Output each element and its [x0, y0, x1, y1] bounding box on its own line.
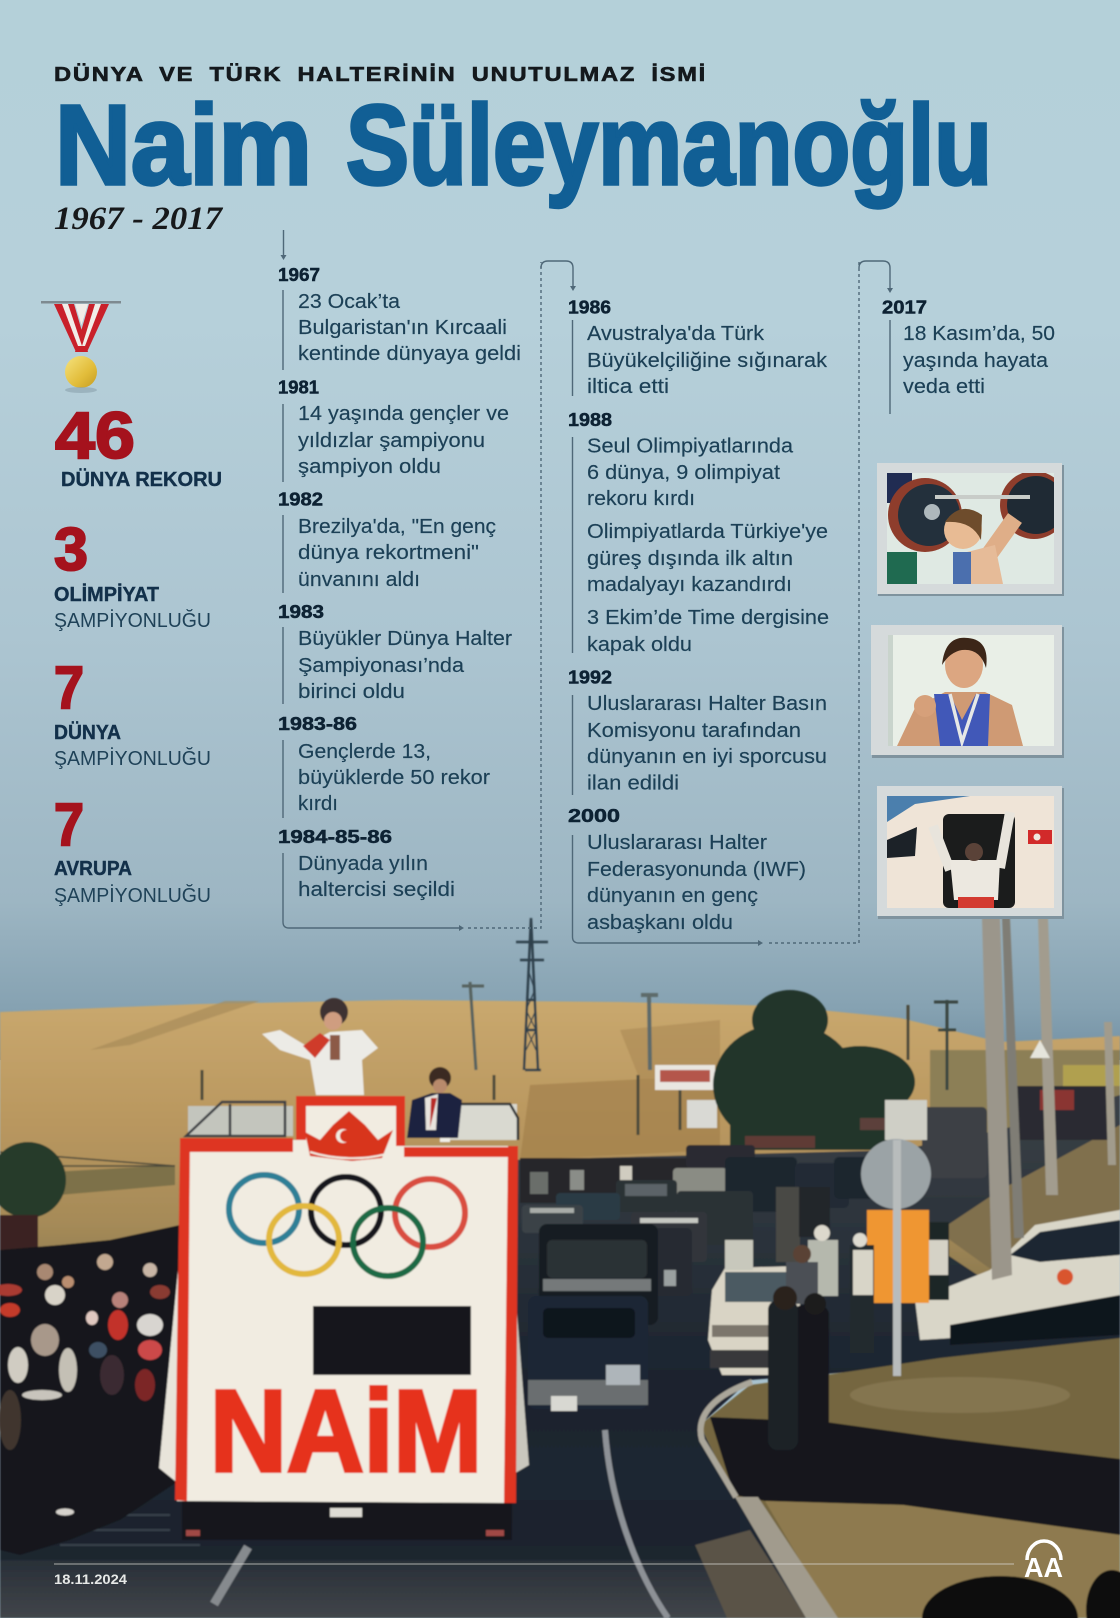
- car: police car: [915, 1210, 1120, 1345]
- photo scene: victory parade: [0, 918, 1120, 1618]
- 1992: [568, 666, 827, 794]
- 1983: Şampiyonası’nda: [298, 654, 465, 677]
- 1967: 23 Ocak’ta: [298, 290, 401, 313]
- stat: world championships: [54, 654, 211, 770]
- 1986: iltica etti: [587, 375, 669, 398]
- stat: olympic championships: [54, 516, 211, 632]
- timeline column 3: 2017: 2017: [882, 296, 927, 318]
- car: white sedan: [708, 1266, 800, 1375]
- 2000: dünyanın en genç: [587, 884, 758, 907]
- 1983-86: büyüklerde 50 rekor: [298, 766, 490, 789]
- 1981: 14 yaşında gençler ve: [298, 402, 509, 425]
- medal icon: [41, 301, 121, 393]
- road markings: [60, 1430, 668, 1618]
- photo 3: waving from plane door: [877, 786, 1064, 919]
- 1988: rekoru kırdı: [587, 487, 695, 510]
- 2000: Uluslararası Halter: [587, 831, 767, 854]
- 1983: birinci oldu: [298, 680, 405, 703]
- stat: olympic championships: 3: [54, 516, 88, 583]
- 1992: 1992: [568, 666, 612, 688]
- man in suit: [407, 1067, 462, 1138]
- hills: [0, 1000, 1120, 1320]
- 1988: [568, 409, 829, 656]
- banner red border: [175, 1096, 518, 1503]
- 1983: Büyükler Dünya Halter: [298, 627, 512, 650]
- title: Süleymanoğlu: [346, 82, 992, 208]
- road: [0, 1095, 1120, 1618]
- car: dark navy sedan: [528, 1296, 648, 1411]
- side cloth: [159, 1270, 180, 1485]
- 1982: Brezilya'da, "En genç: [298, 515, 496, 538]
- 1983-86: kırdı: [298, 792, 338, 815]
- 1992: Komisyonu tarafından: [587, 719, 801, 742]
- timeline column 3: 2017: 18 Kasım’da, 50: [903, 322, 1055, 345]
- 1986: [568, 296, 828, 398]
- timeline connector arrows: [280, 230, 893, 946]
- 1986: 1986: [568, 296, 611, 318]
- 1983: [278, 601, 512, 703]
- bottom heads silhouette: [922, 1570, 1120, 1618]
- stat: world championships: 7: [54, 654, 84, 721]
- 1984-85-86: Dünyada yılın: [298, 852, 428, 875]
- stat: world championships: DÜNYA: [54, 721, 121, 744]
- stat: olympic championships: ŞAMPİYONLUĞU: [54, 609, 211, 632]
- 1988: 3 Ekim’de Time dergisine: [587, 606, 829, 629]
- background sky: [0, 0, 1120, 1060]
- 1981: yıldızlar şampiyonu: [298, 429, 485, 452]
- 1988: Olimpiyatlarda Türkiye'ye: [587, 520, 828, 543]
- 1988: Seul Olimpiyatlarında: [587, 434, 794, 458]
- timeline column 1: [278, 264, 521, 901]
- 2000: 2000: [568, 805, 620, 826]
- crowd behind cars: [520, 1118, 920, 1203]
- 1983-86: Gençlerde 13,: [298, 740, 431, 763]
- 1981: şampiyon oldu: [298, 455, 441, 478]
- stat: european championships: AVRUPA: [54, 858, 132, 880]
- 1988: madalyayı kazandırdı: [587, 573, 792, 596]
- 1967: 1967: [278, 264, 320, 285]
- 1982: ünvanını aldı: [298, 568, 420, 591]
- poles: [885, 918, 1116, 1280]
- road signs: [861, 1139, 931, 1376]
- life dates: 1967 - 2017: [54, 201, 224, 237]
- stat: european championships: ŞAMPİYONLUĞU: [54, 884, 211, 907]
- 1982: [278, 488, 496, 591]
- upper right grass: [920, 1125, 1120, 1300]
- 1982: 1982: [278, 488, 323, 510]
- 1988: 1988: [568, 409, 612, 430]
- timeline column 3: 2017: [882, 296, 1055, 398]
- crown: [305, 1111, 393, 1161]
- 1967: Bulgaristan'ın Kırcaali: [298, 316, 507, 339]
- stat: world records: DÜNYA REKORU: [61, 468, 222, 491]
- photo 2: smiling with medal: [871, 625, 1064, 758]
- trees: [0, 990, 915, 1265]
- 2000: asbaşkanı oldu: [587, 911, 733, 934]
- top rails: [186, 1102, 518, 1142]
- 1988: güreş dışında ilk altın: [587, 547, 793, 570]
- olympic rings: [229, 1175, 465, 1276]
- timeline column 3: 2017: yaşında hayata: [903, 349, 1049, 372]
- 1983-86: [278, 713, 490, 815]
- 1967: [278, 264, 521, 365]
- date: 18.11.2024: [54, 1571, 127, 1587]
- 1984-85-86: 1984-85-86: [278, 826, 392, 847]
- stat: european championships: [54, 791, 211, 907]
- 1984-85-86: [278, 826, 455, 901]
- AA logo: AA: [1024, 1552, 1063, 1583]
- billboard: [655, 1065, 717, 1128]
- truck underside: [182, 1500, 512, 1540]
- police officers and bystanders: [725, 1187, 949, 1465]
- foreground grass, shadow and curb: [695, 1338, 1120, 1618]
- athlete on truck: [262, 998, 378, 1095]
- stat: european championships: 7: [54, 791, 84, 858]
- 1992: Uluslararası Halter Basın: [587, 692, 827, 715]
- traffic: cars: [522, 1065, 1120, 1411]
- 1983-86: 1983-86: [278, 713, 357, 734]
- 1983: 1983: [278, 601, 324, 622]
- 1984-85-86: haltercisi seçildi: [298, 878, 455, 901]
- timeline column 2: [568, 296, 829, 934]
- footer rule: [54, 1564, 1014, 1565]
- timeline column 3: 2017: veda etti: [903, 375, 985, 398]
- 1967: kentinde dünyaya geldi: [298, 342, 521, 365]
- truck with banner: [159, 1096, 529, 1540]
- photo 1: lifting barbell: [877, 463, 1068, 596]
- title: Naim: [55, 82, 312, 208]
- 1992: dünyanın en iyi sporcusu: [587, 745, 827, 768]
- 1986: Büyükelçiliğine sığınarak: [587, 349, 828, 372]
- banner panel: [177, 1096, 516, 1503]
- title: [55, 82, 992, 208]
- 1982: dünya rekortmeni": [298, 541, 479, 564]
- black panel: [313, 1306, 471, 1375]
- stat: world records: 46: [55, 398, 135, 472]
- crowd left: [0, 1225, 180, 1555]
- 2000: Federasyonunda (IWF): [587, 858, 806, 881]
- stat: world championships: ŞAMPİYONLUĞU: [54, 747, 211, 770]
- banner name: NAiM: [210, 1366, 482, 1496]
- 2000: [568, 805, 806, 934]
- stat: olympic championships: OLİMPİYAT: [54, 583, 159, 606]
- 1981: 1981: [278, 376, 319, 398]
- power towers and poles: [0, 918, 958, 1166]
- 1988: 6 dünya, 9 olimpiyat: [587, 461, 780, 484]
- car: black SUV: [539, 1224, 658, 1325]
- 1992: ilan edildi: [587, 772, 679, 794]
- 1988: kapak oldu: [587, 633, 692, 656]
- 1981: [278, 376, 509, 478]
- subtitle: DÜNYA VE TÜRK HALTERİNİN UNUTULMAZ İSMİ: [54, 63, 707, 86]
- 1986: Avustralya'da Türk: [587, 322, 765, 345]
- stat: world records: [55, 398, 222, 491]
